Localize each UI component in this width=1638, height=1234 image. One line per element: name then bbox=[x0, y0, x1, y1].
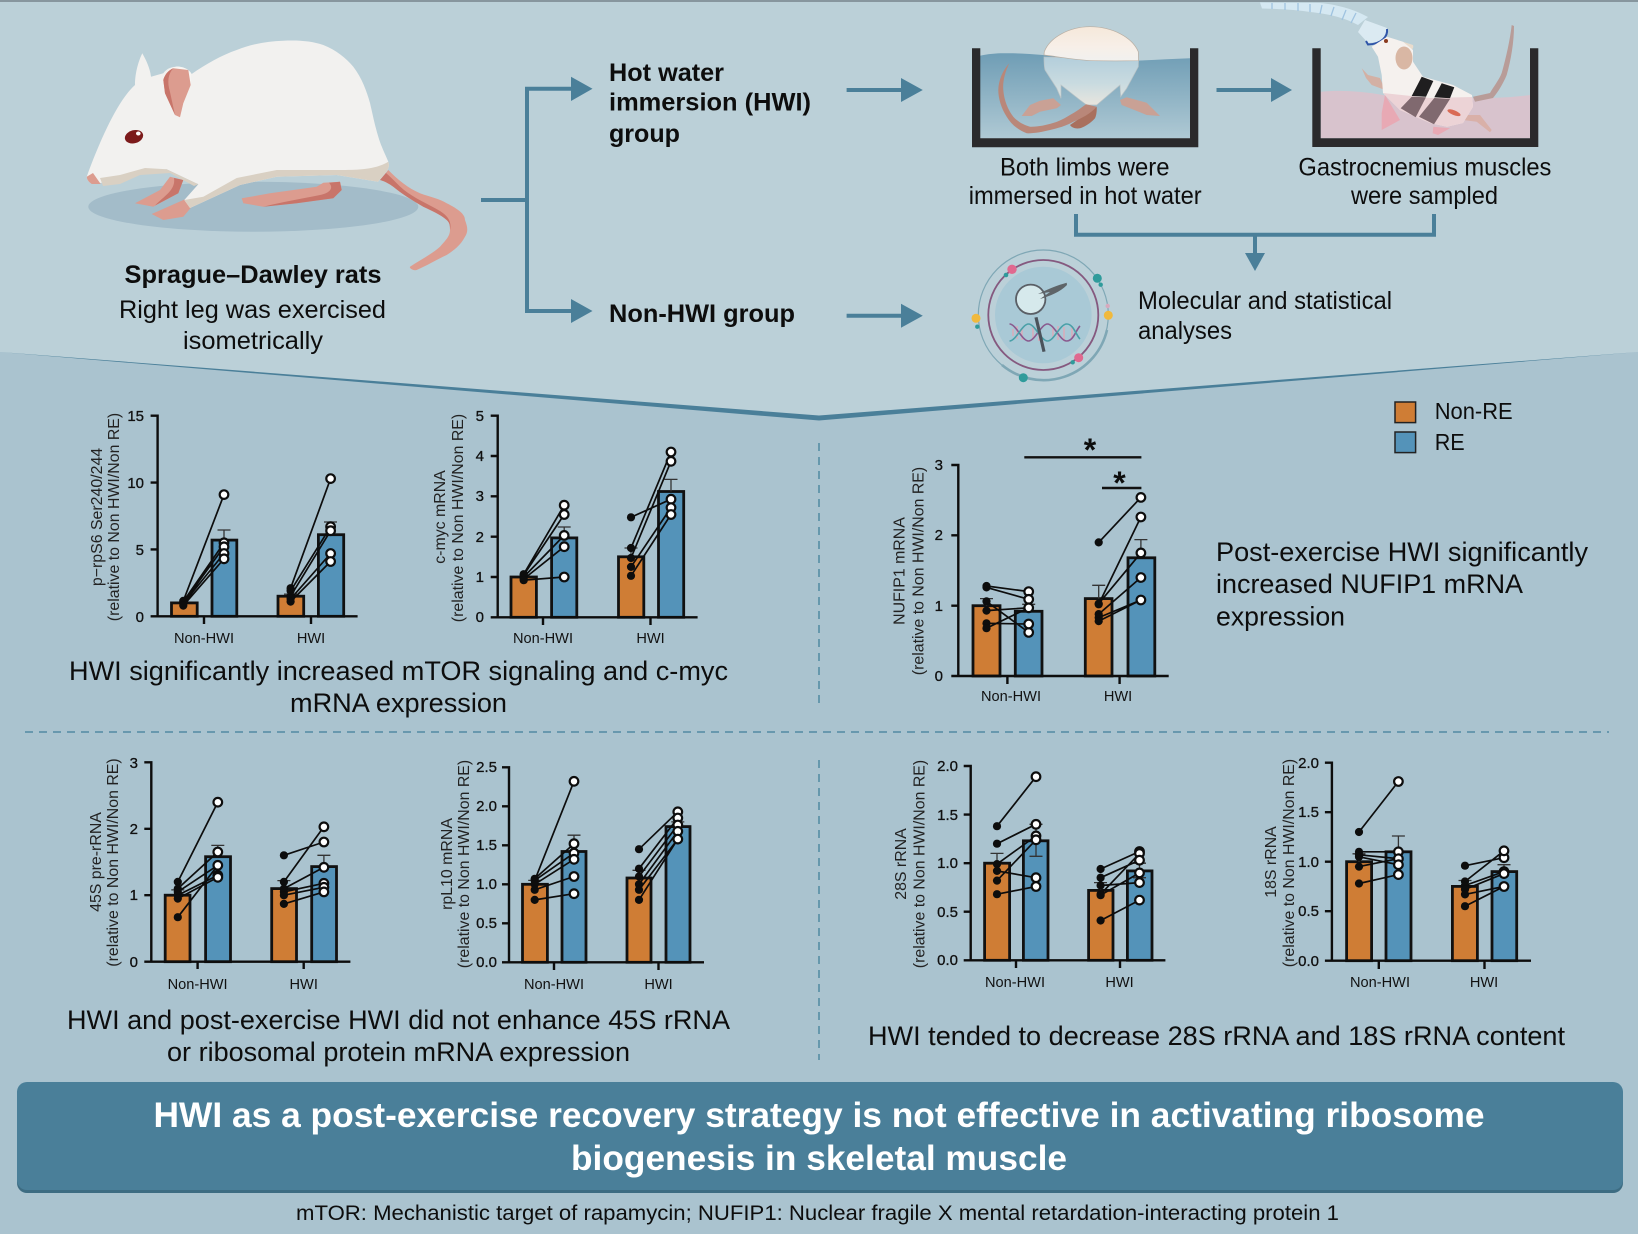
chart: 28S rRNA: 1.5 bbox=[937, 807, 958, 824]
text: gastrocnemius caption: Gastrocnemius muscles bbox=[1298, 154, 1551, 182]
chart: rpL10 bbox=[439, 759, 704, 993]
conclusion banner: biogenesis in skeletal muscle bbox=[571, 1139, 1067, 1178]
divider: horizontal bbox=[25, 731, 1609, 733]
chart: NUFIP1: 3 bbox=[935, 457, 943, 474]
chart: p-rpS6: 5 bbox=[136, 542, 144, 559]
text: NUFIP1 caption bbox=[1216, 537, 1589, 632]
chart: 28S rRNA bbox=[893, 758, 1165, 991]
chart: c-myc: 5 bbox=[476, 408, 484, 425]
text: rat description: Right leg was exercised bbox=[119, 296, 386, 324]
text: rat description: Sprague–Dawley rats bbox=[124, 261, 382, 289]
chart: p-rpS6: p−rpS6 Ser240/244 bbox=[89, 448, 106, 586]
chart: NUFIP1: HWI bbox=[1104, 689, 1132, 705]
chart: c-myc: 4 bbox=[476, 448, 484, 465]
text: mTOR caption: HWI significantly increased mTOR signaling and c-myc bbox=[69, 656, 728, 686]
chart: 45S pre-rRNA: 45S pre-rRNA bbox=[88, 812, 105, 912]
chart: p-rpS6: Non-HWI bbox=[174, 631, 234, 647]
legend: RE bbox=[1435, 429, 1465, 455]
divider: vertical bottom bbox=[818, 760, 820, 1060]
text: both limbs caption bbox=[969, 154, 1202, 210]
text: 28S caption: HWI tended to decrease 28S rRNA and 18S rRNA content bbox=[868, 1021, 1566, 1051]
text: HWI group: immersion (HWI) bbox=[609, 88, 811, 116]
chart: rpL10: 2.0 bbox=[476, 798, 497, 815]
legend: Non-RE bbox=[1435, 398, 1513, 424]
chart: p-rpS6 bbox=[89, 408, 358, 647]
chart: p-rpS6: HWI bbox=[297, 631, 325, 647]
text: HWI group: Hot water bbox=[609, 59, 724, 87]
chart: rpL10: 1.5 bbox=[476, 837, 497, 854]
text: both limbs caption: Both limbs were bbox=[1000, 154, 1170, 182]
chart: 45S pre-rRNA: 0 bbox=[130, 954, 138, 971]
arrow: split to the two groups bbox=[481, 77, 592, 323]
chart: 45S pre-rRNA bbox=[88, 755, 350, 993]
chart: rpL10: HWI bbox=[644, 977, 673, 993]
chart: c-myc: 3 bbox=[476, 488, 484, 505]
legend bbox=[1395, 398, 1513, 455]
arrow: HWI group to immersion bbox=[847, 78, 923, 102]
chart: NUFIP1: NUFIP1 mRNA bbox=[892, 517, 909, 625]
chart: rpL10: rpL10 mRNA bbox=[439, 818, 456, 910]
chart: NUFIP1: 1 bbox=[935, 598, 943, 615]
chart: 28S rRNA: 2.0 bbox=[937, 758, 958, 775]
chart: rpL10: Non-HWI bbox=[524, 977, 584, 993]
chart: 18S rRNA: HWI bbox=[1470, 975, 1498, 991]
chart: NUFIP1: (relative to Non HWI/Non RE) bbox=[910, 467, 928, 675]
chart: NUFIP1 bbox=[892, 432, 1169, 705]
chart: 45S pre-rRNA: 2 bbox=[130, 821, 138, 838]
chart: 18S rRNA: 18S rRNA bbox=[1263, 826, 1280, 898]
arrow: Non-HWI to analyses bbox=[847, 304, 923, 328]
text: HWI group: group bbox=[609, 120, 680, 148]
chart: 28S rRNA: 1.0 bbox=[937, 855, 958, 872]
text: analyses: Molecular and statistical bbox=[1138, 287, 1392, 315]
chart: 18S rRNA: (relative to Non HWI/Non RE) bbox=[1281, 759, 1298, 967]
chart: c-myc: 2 bbox=[476, 529, 484, 546]
chart: 28S rRNA: (relative to Non HWI/Non RE) bbox=[912, 760, 929, 968]
conclusion banner: HWI as a post-exercise recovery strategy is not effective in activating ribosome bbox=[154, 1096, 1484, 1135]
text: mTOR caption bbox=[69, 656, 728, 718]
text: gastrocnemius caption: were sampled bbox=[1350, 182, 1498, 210]
chart: 28S rRNA: HWI bbox=[1105, 975, 1134, 991]
chart: c-myc: 1 bbox=[476, 569, 484, 586]
chart: 18S rRNA bbox=[1263, 755, 1531, 991]
chart: c-myc: 0 bbox=[476, 609, 484, 626]
text: 45S caption bbox=[67, 1005, 730, 1067]
chart: NUFIP1: * bbox=[1084, 432, 1097, 468]
text: both limbs caption: immersed in hot water bbox=[969, 182, 1202, 210]
wedge divider line bbox=[0, 352, 1638, 420]
chart: 45S pre-rRNA: (relative to Non HWI/Non RE) bbox=[105, 758, 122, 967]
chart: p-rpS6: 10 bbox=[127, 475, 144, 492]
icon: tank with anesthetised rat sampled bbox=[1260, 2, 1538, 147]
text: rat description bbox=[119, 261, 386, 355]
icon: molecular analysis with magnifier and DNA bbox=[972, 250, 1113, 382]
chart: p-rpS6: 0 bbox=[136, 609, 144, 626]
text: NUFIP1 caption: increased NUFIP1 mRNA bbox=[1216, 569, 1523, 599]
chart: c-myc: (relative to Non HWI/Non RE) bbox=[450, 414, 467, 622]
chart: c-myc: Non-HWI bbox=[513, 631, 573, 647]
chart: 28S rRNA: 0.5 bbox=[937, 904, 958, 921]
chart: 45S pre-rRNA: HWI bbox=[290, 977, 318, 993]
chart: rpL10: (relative to Non HWI/Non RE) bbox=[456, 760, 473, 968]
text: 45S caption: HWI and post-exercise HWI did not enhance 45S rRNA bbox=[67, 1005, 730, 1035]
text: analyses bbox=[1138, 287, 1392, 345]
chart: NUFIP1: 0 bbox=[935, 668, 943, 685]
conclusion banner bbox=[17, 1082, 1623, 1193]
arrow: immersion to sampling bbox=[1216, 78, 1292, 102]
divider: vertical top bbox=[818, 443, 820, 705]
chart: 18S rRNA: 1.5 bbox=[1298, 804, 1319, 821]
lower results panel background bbox=[0, 352, 1638, 1234]
chart: 18S rRNA: 1.0 bbox=[1298, 854, 1319, 871]
chart: 45S pre-rRNA: 1 bbox=[130, 887, 138, 904]
arrow: bracket to analyses bbox=[1076, 214, 1434, 271]
chart: NUFIP1: Non-HWI bbox=[981, 689, 1041, 705]
chart: 28S rRNA: 28S rRNA bbox=[893, 828, 910, 900]
chart: 18S rRNA: 0.5 bbox=[1298, 903, 1319, 920]
text: NUFIP1 caption: expression bbox=[1216, 602, 1345, 632]
text: rat description: isometrically bbox=[183, 327, 324, 355]
text: HWI group bbox=[609, 59, 811, 148]
chart: c-myc: HWI bbox=[636, 631, 665, 647]
text: 45S caption: or ribosomal protein mRNA expression bbox=[167, 1037, 630, 1067]
text: mTOR caption: mRNA expression bbox=[290, 688, 507, 718]
text: gastrocnemius caption bbox=[1298, 154, 1551, 210]
chart: c-myc bbox=[432, 408, 698, 647]
chart: 18S rRNA: 0.0 bbox=[1298, 953, 1319, 970]
chart: 28S rRNA: 0.0 bbox=[937, 952, 958, 969]
chart: NUFIP1: * bbox=[1113, 465, 1126, 501]
chart: c-myc: c-myc mRNA bbox=[432, 470, 449, 564]
chart: 45S pre-rRNA: 3 bbox=[130, 755, 138, 772]
footnote: mTOR: Mechanistic target of rapamycin; NUFIP1: Nuclear fragile X mental retardation-interacting protein 1 bbox=[296, 1201, 1339, 1225]
chart: rpL10: 2.5 bbox=[476, 759, 497, 776]
chart: NUFIP1: 2 bbox=[935, 527, 943, 544]
icon: tank with rat immersed in hot water bbox=[972, 27, 1198, 147]
text: analyses: analyses bbox=[1138, 317, 1232, 345]
chart: 18S rRNA: 2.0 bbox=[1298, 755, 1319, 772]
chart: rpL10: 0.5 bbox=[476, 915, 497, 932]
chart: p-rpS6: (relative to Non HWI/Non RE) bbox=[106, 413, 123, 621]
chart: p-rpS6: 15 bbox=[127, 408, 144, 425]
chart: 18S rRNA: Non-HWI bbox=[1350, 975, 1410, 991]
chart: 28S rRNA: Non-HWI bbox=[985, 975, 1045, 991]
chart: 45S pre-rRNA: Non-HWI bbox=[168, 977, 228, 993]
chart: rpL10: 1.0 bbox=[476, 876, 497, 893]
icon: exercised rat bbox=[87, 40, 467, 270]
chart: rpL10: 0.0 bbox=[476, 954, 497, 971]
text: NUFIP1 caption: Post-exercise HWI significantly bbox=[1216, 537, 1589, 567]
text: Non-HWI group: Non-HWI group bbox=[609, 300, 795, 328]
